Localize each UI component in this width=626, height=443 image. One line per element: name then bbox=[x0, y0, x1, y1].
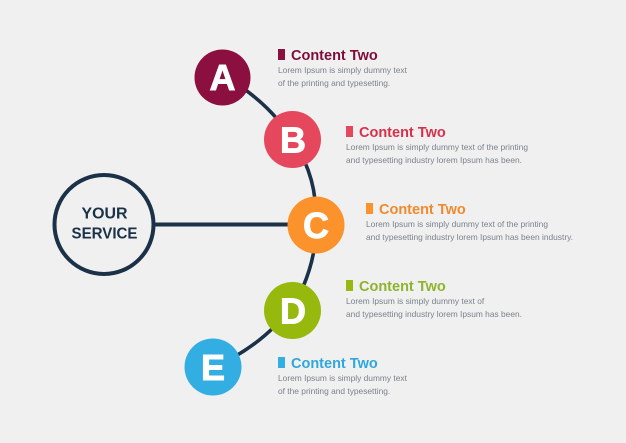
text block A bbox=[278, 48, 407, 88]
marker B bbox=[346, 126, 352, 137]
connector: hub to C bbox=[154, 222, 290, 226]
description E: of the printing and typesetting. bbox=[278, 386, 390, 396]
description E bbox=[278, 373, 407, 396]
marker D bbox=[346, 280, 352, 291]
description B bbox=[346, 142, 528, 165]
text block B bbox=[346, 125, 528, 165]
description B: Lorem Ipsum is simply dummy text of the printing bbox=[346, 142, 528, 152]
description A: of the printing and typesetting. bbox=[278, 78, 390, 88]
description C bbox=[366, 219, 573, 242]
heading E: Content Two bbox=[291, 356, 378, 372]
text block E bbox=[278, 356, 407, 396]
description D: and typesetting industry lorem Ipsum has been. bbox=[346, 309, 522, 319]
circle E: E bbox=[201, 347, 225, 388]
hub circle: your service: SERVICE bbox=[72, 225, 138, 242]
circle A: A bbox=[210, 57, 236, 98]
circle A bbox=[194, 50, 250, 106]
circle E bbox=[184, 338, 242, 396]
description A bbox=[278, 65, 407, 88]
heading D: Content Two bbox=[359, 279, 446, 295]
circle C bbox=[288, 196, 344, 254]
circle C: C bbox=[303, 205, 329, 246]
heading C: Content Two bbox=[379, 202, 466, 218]
marker E bbox=[278, 357, 284, 368]
description C: Lorem Ipsum is simply dummy text of the printing bbox=[366, 219, 548, 229]
description C: and typesetting industry lorem Ipsum has been industry. bbox=[366, 232, 573, 242]
heading A: Content Two bbox=[291, 48, 378, 64]
description E: Lorem Ipsum is simply dummy text bbox=[278, 373, 407, 383]
heading B: Content Two bbox=[359, 125, 446, 141]
description D: Lorem Ipsum is simply dummy text of bbox=[346, 296, 484, 306]
marker C bbox=[366, 203, 372, 214]
circle D: D bbox=[280, 290, 306, 332]
circle D bbox=[264, 282, 321, 339]
description B: and typesetting industry lorem Ipsum has been. bbox=[346, 155, 522, 165]
hub circle: your service: YOUR bbox=[82, 205, 128, 222]
marker A bbox=[278, 49, 284, 60]
circle B bbox=[264, 111, 321, 168]
description D bbox=[346, 296, 522, 319]
connector arc bbox=[234, 86, 315, 357]
text block C bbox=[366, 202, 573, 242]
description A: Lorem Ipsum is simply dummy text bbox=[278, 65, 407, 75]
hub circle: your service bbox=[54, 175, 154, 274]
circle B: B bbox=[280, 120, 306, 160]
text block D bbox=[346, 279, 522, 319]
